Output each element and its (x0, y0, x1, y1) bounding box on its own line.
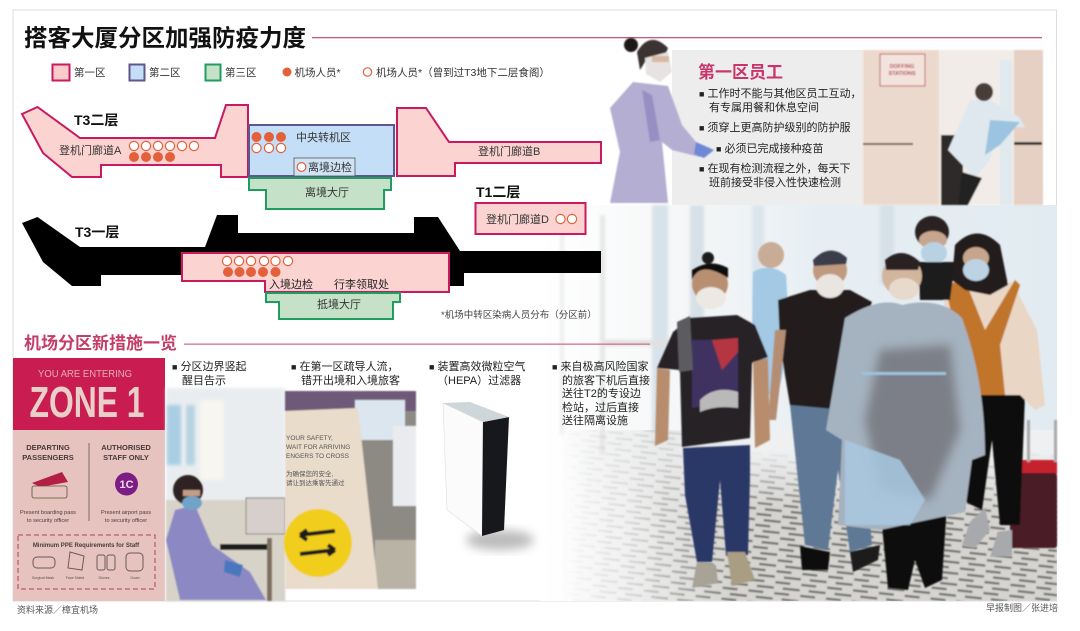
caption (172, 360, 246, 387)
sign: you are entering zone 1: Present boarding pass (20, 510, 76, 516)
sign: you are entering zone 1: YOU ARE ENTERING (38, 368, 132, 380)
PPE requirements box: Minimum PPE Requirements for Staff (33, 543, 140, 549)
caption: high-risk arrivals (552, 359, 650, 427)
bullet list (699, 86, 862, 189)
gate corridor A (22, 105, 248, 177)
photo: direction sign with yellow arrows: 为确保您的安全, (286, 469, 334, 478)
photo: direction sign with yellow arrows: WAIT FOR ARRIVING (286, 444, 350, 451)
legend: zone 3: 第三区 (225, 66, 256, 79)
man in Fubu tee (655, 252, 770, 588)
sign: you are entering zone 1: DEPARTING (26, 443, 70, 452)
caption: ■ 在第一区疏导人流， (291, 359, 398, 373)
T1 level 2 (476, 184, 586, 234)
departure hall: 离境大厅 (305, 185, 349, 199)
icon: boarding pass (32, 472, 68, 498)
photo: staff member seated at zone boundary (166, 360, 285, 601)
PPE requirements box: Surgical Mask (32, 576, 54, 580)
bullet list: ■ 在现有检测流程之外，每天下 (699, 161, 850, 175)
bullet list: ■ 必须已完成接种疫苗 (716, 141, 824, 155)
photo: doffing station (863, 50, 1043, 205)
T3 level 1 (22, 215, 601, 319)
photo: doffing station: DOFFING (890, 64, 914, 70)
caption: high-risk arrivals: 送往T2的专设边 (562, 386, 641, 400)
caption: high-risk arrivals: ■ 来自极高风险国家 (552, 359, 648, 373)
title: 搭客大厦分区加强防疫力度 (24, 24, 306, 51)
photo: direction sign with yellow arrows: 请让到达乘客先通过 (286, 478, 345, 487)
background person in blue gown (752, 242, 790, 395)
sign: you are entering zone 1: ZONE 1 (30, 378, 144, 427)
T1 level 2: 登机门廊道D (486, 212, 549, 226)
woman in orange vest (942, 234, 1045, 557)
terminal floor plan (22, 105, 601, 321)
legend: zone 1 (52, 64, 106, 80)
caption: ■ 装置高效微粒空气 (429, 359, 526, 373)
legend: zone 2: 第二区 (149, 66, 180, 79)
PPE requirements box: Gown (130, 576, 140, 580)
sign: you are entering zone 1 (13, 358, 165, 601)
T3 level 2 (22, 105, 601, 209)
sign: you are entering zone 1: to security officer (27, 518, 69, 524)
sign: you are entering zone 1: AUTHORISED (101, 443, 151, 452)
legend: airport staff who visited T3 B2 canteen: 机场人员*（曾到过T3地下二层食阁） (376, 66, 550, 79)
photo: direction sign with yellow arrows: YOUR SAFETY, (286, 435, 333, 442)
source credit: 资料来源／樟宜机场 (17, 604, 98, 615)
man in black polo and cap (768, 250, 880, 572)
suitcase (1010, 420, 1057, 548)
caption: （HEPA）过滤器 (437, 374, 521, 387)
bullet list: ■ 工作时不能与其他区员工互动， (699, 86, 862, 100)
PPE requirements box (18, 535, 155, 589)
icon: airport pass 1C (115, 472, 138, 496)
legend: zone 1: 第一区 (74, 66, 106, 79)
bullet list: 有专属用餐和休息空间 (709, 100, 819, 114)
label: T3 level 2: T3二层 (74, 112, 118, 128)
caption (291, 359, 400, 387)
icon: airport pass 1C: 1C (119, 479, 134, 491)
arrival hall: 抵境大厅 (317, 297, 361, 311)
legend (52, 64, 550, 80)
photo: doffing station: STATIONS (888, 71, 916, 77)
PPE requirements box: Gloves (99, 576, 110, 580)
legend: airport staff: 机场人员* (294, 66, 341, 79)
T1 level 2: T1二层 (476, 184, 520, 200)
T3 level 1: T3一层 (75, 224, 119, 240)
graphic credit: 早报制图／张进培 (986, 602, 1058, 613)
PPE requirements box: Face Shield (66, 576, 84, 580)
caption (429, 359, 526, 387)
nurse (610, 38, 714, 203)
main photo: passengers walking through terminal (540, 205, 1057, 601)
central figure in translucent gown (826, 253, 985, 590)
photo: HEPA filter unit (429, 359, 534, 550)
central transfer area: 中央转机区 (296, 130, 351, 144)
footnote: *机场中转区染病人员分布（分区前） (441, 309, 597, 321)
back man (915, 216, 955, 300)
section heading: new measures: 机场分区新措施一览 (24, 333, 177, 353)
caption: high-risk arrivals: 的旅客下机后直接 (562, 373, 650, 387)
sign: you are entering zone 1: Present airport pass (101, 510, 151, 516)
caption: high-risk arrivals: 检站，过后直接 (562, 400, 639, 414)
photo: direction sign with yellow arrows (284, 359, 416, 589)
legend: zone 2 (130, 64, 180, 80)
legend: zone 3 (206, 64, 256, 80)
sign: you are entering zone 1: STAFF ONLY (103, 453, 149, 462)
caption: high-risk arrivals: 送往隔离设施 (562, 413, 628, 427)
gate corridor A: 登机门廊道A (59, 143, 122, 157)
departure hall (249, 178, 391, 209)
gate corridor B (397, 108, 601, 176)
caption: 醒目告示 (182, 374, 226, 387)
caption: ■ 分区边界竖起 (172, 360, 246, 373)
arrival hall (266, 293, 400, 319)
central transfer area: 离境边检 (308, 160, 352, 174)
arrival zone: 行李领取处 (334, 277, 389, 291)
bullet list: ■ 须穿上更高防护级别的防护服 (699, 120, 850, 134)
central transfer area (249, 125, 394, 176)
panel: zone 1 staff (610, 38, 1043, 205)
arrival zone: 入境边检 (269, 277, 313, 291)
arrival zone (182, 253, 449, 292)
bullet list: 班前接受非侵入性快速检测 (709, 175, 841, 189)
sign: you are entering zone 1: PASSENGERS (22, 453, 74, 462)
caption: 错开出境和入境旅客 (301, 373, 400, 387)
gate corridor B: 登机门廊道B (478, 144, 540, 158)
panel heading: 第一区员工 (698, 62, 783, 82)
photo: direction sign with yellow arrows: ENGERS TO CROSS (286, 453, 350, 460)
sign: you are entering zone 1: to security officer (105, 518, 147, 524)
